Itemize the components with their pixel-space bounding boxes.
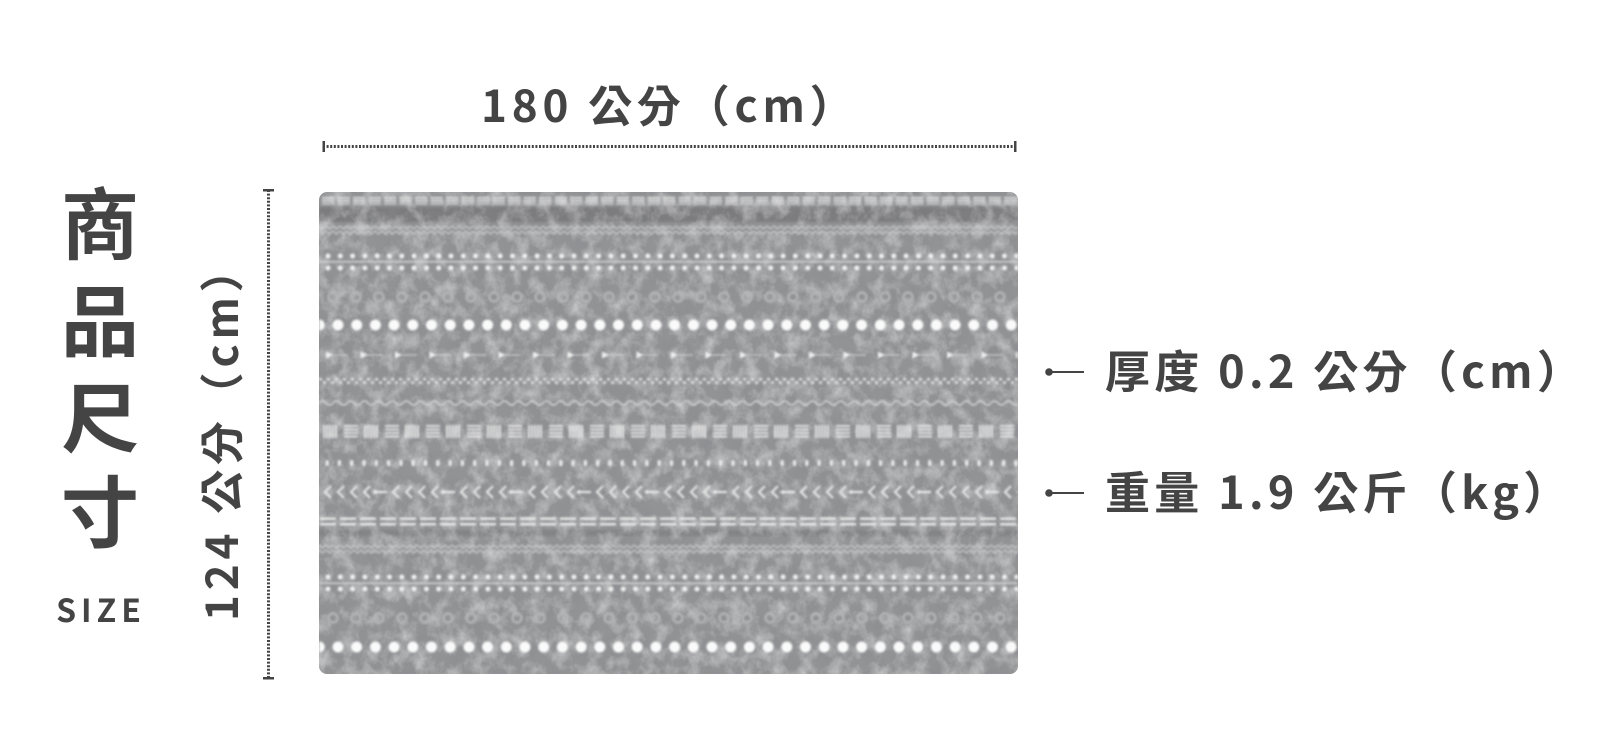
title: 商品尺寸 — [61, 164, 139, 564]
panel: patterned mat — [319, 192, 1018, 674]
mat decorative rows — [319, 196, 1018, 658]
height dimension line — [263, 189, 274, 680]
subtitle: SIZE: SIZE — [56, 586, 146, 632]
height label: 124 公分（cm） — [187, 244, 251, 621]
mat dark bands — [319, 207, 1018, 536]
width label: 180 公分（cm） — [481, 71, 858, 135]
title: 商品尺寸: 尺 — [61, 357, 139, 469]
title: 商品尺寸: 寸 — [61, 452, 139, 564]
title: 商品尺寸: 品 — [61, 261, 139, 373]
title: 商品尺寸: 商 — [61, 164, 139, 276]
callout: thickness: 厚度 0.2 公分（cm） — [1105, 336, 1586, 401]
width dimension line — [322, 141, 1016, 152]
mat mottled texture — [319, 192, 1018, 674]
callout: weight: 重量 1.9 公斤（kg） — [1105, 457, 1573, 522]
